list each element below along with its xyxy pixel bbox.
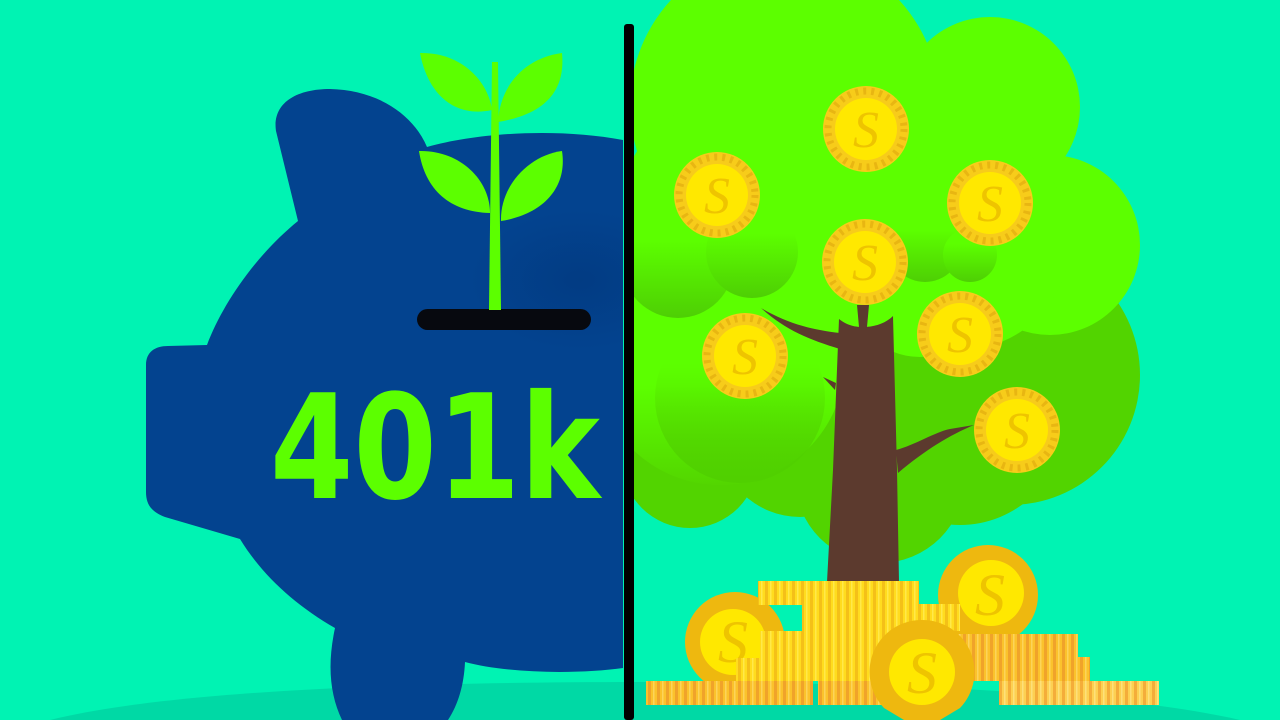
coin 3: S (977, 176, 1003, 233)
pig body silhouette (146, 89, 623, 720)
pile coin back right: S (975, 562, 1005, 628)
pile coin back left: S (718, 609, 748, 675)
coin 4: S (852, 235, 878, 292)
top stub (857, 305, 869, 327)
piggy bank (146, 53, 623, 720)
upper light lobes (620, 0, 1140, 357)
leaf lower left (419, 151, 490, 213)
money tree (634, 0, 1140, 581)
trunk (827, 316, 899, 582)
pile coin back left (685, 592, 785, 692)
seedling stem (489, 62, 501, 310)
canopy lobes shaded (634, 239, 997, 318)
leaf upper right (498, 53, 562, 122)
seedling (419, 53, 563, 310)
coin stacks (646, 581, 1159, 705)
coin pile (646, 545, 1159, 720)
leaf upper left (420, 53, 492, 112)
mid shade lobe (655, 385, 825, 479)
pile coin back right (938, 545, 1038, 645)
leaf lower right (501, 151, 563, 221)
coin 5 (702, 313, 788, 399)
pile coin front: S (907, 640, 937, 706)
coin 5: S (732, 329, 758, 386)
401k label: 401k (270, 364, 603, 533)
coin 6 (917, 291, 1003, 377)
coin 7 (974, 387, 1060, 473)
pile coin front (870, 620, 974, 720)
tree trunk and branches (761, 305, 974, 582)
coin 6: S (947, 307, 973, 364)
branch right (896, 425, 974, 473)
canopy light layer (595, 0, 1140, 485)
ground (50, 682, 1240, 720)
pig body shading (544, 257, 616, 302)
divider line (624, 24, 634, 720)
coin 1 (823, 86, 909, 172)
coin 4 (822, 219, 908, 305)
coin 2 (674, 152, 760, 238)
coin 1: S (853, 102, 879, 159)
coin slot (417, 309, 591, 330)
lower left light lobe (634, 297, 838, 472)
branch left (761, 308, 840, 349)
coin 7: S (1004, 403, 1030, 460)
coin 2: S (704, 168, 730, 225)
small twig (823, 377, 836, 390)
coin 3 (947, 160, 1033, 246)
canopy dark back layer (634, 304, 1140, 561)
